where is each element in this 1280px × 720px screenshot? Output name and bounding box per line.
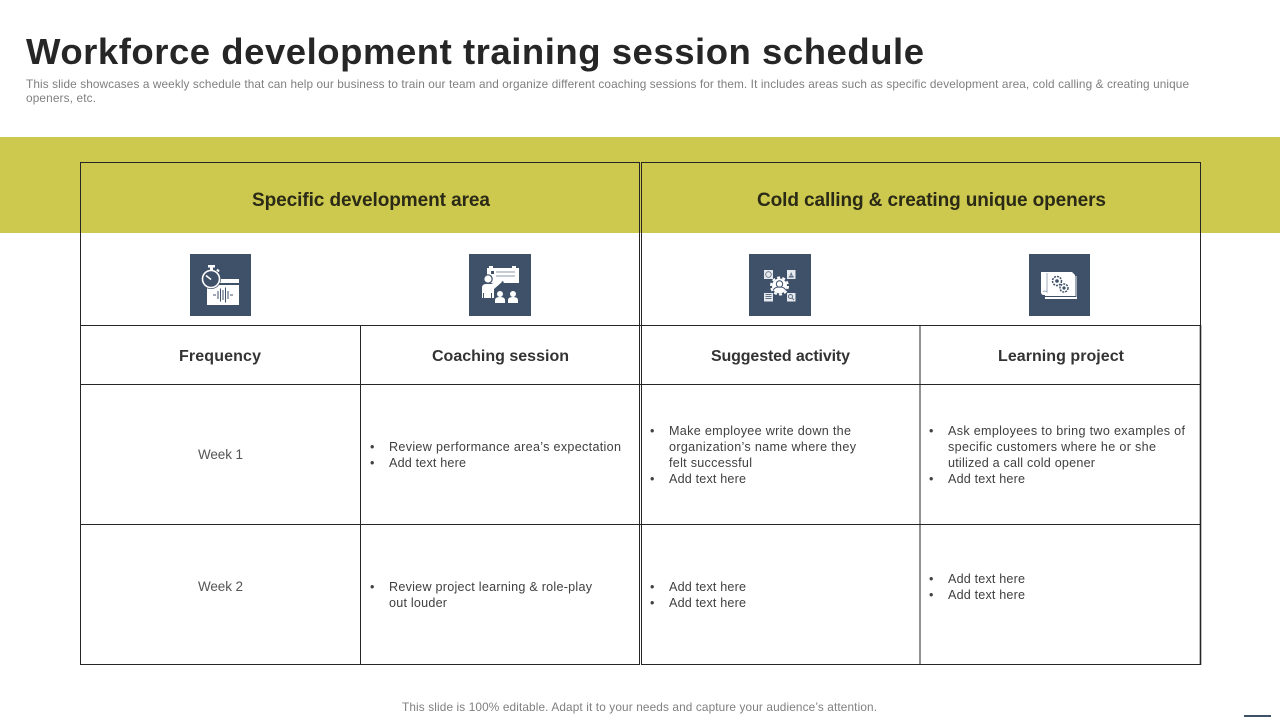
cell: week 2 learning project: • <box>929 588 933 602</box>
column header: suggested activity: Suggested activity <box>711 348 850 365</box>
cell: week 2 learning project: Add text here <box>948 572 1025 586</box>
cell: week 2 learning project: Add text here <box>948 588 1025 602</box>
cell: week 1 suggested activity: Make employee write down the <box>669 424 851 438</box>
heading: specific development area: Specific development area <box>252 190 490 211</box>
cell: week 1 suggested activity: • <box>650 424 654 438</box>
cell: week 1 learning project: • <box>929 472 933 486</box>
cell: week 2 suggested activity <box>650 580 746 610</box>
title: Workforce development training session schedule <box>26 31 924 72</box>
column header: coaching session: Coaching session <box>432 348 569 365</box>
cell: week 2 suggested activity: • <box>650 580 654 594</box>
cell: week 1 suggested activity: felt successful <box>669 456 752 470</box>
cell: week 1 learning project: Ask employees to bring two examples of <box>948 424 1186 438</box>
cell: week 2 suggested activity: Add text here <box>669 596 746 610</box>
cell: week 2 suggested activity: Add text here <box>669 580 746 594</box>
column header: frequency: Frequency <box>179 348 261 365</box>
icon: presenter with audience <box>469 254 531 316</box>
cell: week 1 suggested activity: organization’s name where they <box>669 440 857 454</box>
cell: week 1 suggested activity <box>650 424 857 486</box>
column header: learning project: Learning project <box>998 348 1125 365</box>
icon: stopwatch and audio panel <box>190 254 251 316</box>
cell: week 2 coaching session <box>370 580 593 610</box>
footer note: This slide is 100% editable. Adapt it to your needs and capture your audience’s attention. <box>402 700 877 714</box>
cell: week 2 coaching session: out louder <box>389 596 447 610</box>
cell: week 1 suggested activity: • <box>650 472 654 486</box>
icon: gear with person and four squares <box>749 254 811 316</box>
subtitle: This slide showcases a weekly schedule that can help our business to train our team and organize different coaching sessions for them. It includes areas such as specific development area, cold calling & creating unique <box>26 77 1189 91</box>
cell: week 2 suggested activity: • <box>650 596 654 610</box>
cell: week 1 coaching session: • <box>370 456 374 470</box>
row label: week 1: Week 1 <box>198 447 243 462</box>
subtitle <box>26 77 1189 105</box>
icon: stacked pages with gears <box>1029 254 1090 316</box>
cell: week 2 coaching session: Review project learning & role-play <box>389 580 593 594</box>
row label: week 2: Week 2 <box>198 579 243 594</box>
table grid <box>80 162 1200 665</box>
corner accent <box>1244 715 1271 717</box>
cell: week 1 learning project: Add text here <box>948 472 1025 486</box>
cell: week 1 coaching session: Review performance area’s expectation <box>389 440 621 454</box>
cell: week 1 coaching session <box>370 440 621 470</box>
cell: week 1 learning project: utilized a call cold opener <box>948 456 1095 470</box>
cell: week 1 learning project <box>929 424 1186 486</box>
cell: week 1 coaching session: Add text here <box>389 456 466 470</box>
subtitle: openers, etc. <box>26 91 96 105</box>
yellow header band <box>0 137 1280 233</box>
cell: week 2 learning project: • <box>929 572 933 586</box>
cell: week 1 coaching session: • <box>370 440 374 454</box>
cell: week 1 learning project: specific customers where he or she <box>948 440 1156 454</box>
cell: week 1 suggested activity: Add text here <box>669 472 746 486</box>
cell: week 1 learning project: • <box>929 424 933 438</box>
heading: cold calling: Cold calling & creating unique openers <box>757 190 1106 211</box>
cell: week 2 learning project <box>929 572 1025 602</box>
schedule table <box>80 162 1200 665</box>
cell: week 2 coaching session: • <box>370 580 374 594</box>
